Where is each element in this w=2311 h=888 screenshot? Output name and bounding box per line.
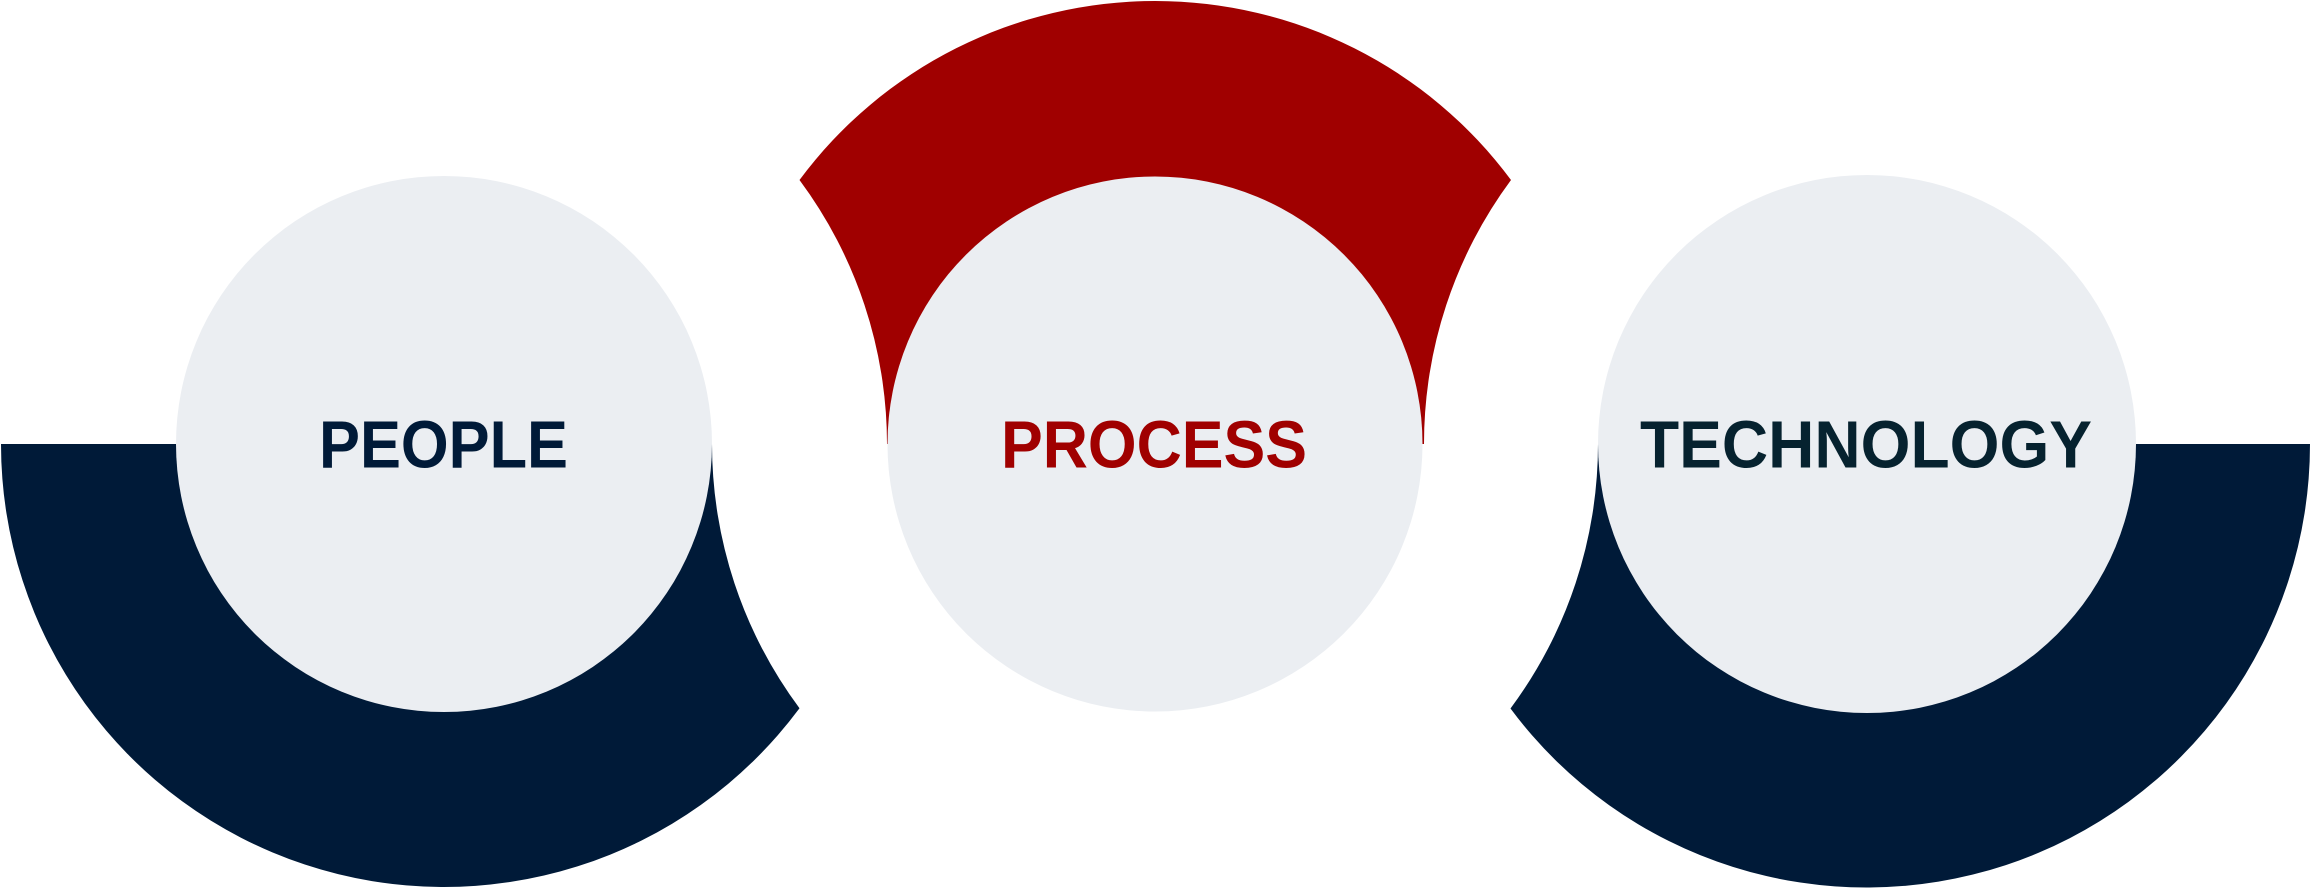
process red arc [800, 1, 1511, 444]
technology circle [1598, 175, 2136, 713]
people navy arc [1, 444, 800, 887]
technology navy arc [1510, 444, 2310, 888]
people circle [176, 176, 712, 712]
process circle [888, 176, 1422, 712]
panel: process [800, 1, 1511, 712]
technology label: TECHNOLOGY [1640, 408, 2092, 483]
panel: people [1, 176, 800, 887]
people label: PEOPLE [319, 408, 568, 483]
process label: PROCESS [1001, 408, 1307, 483]
panel: technology [1510, 175, 2310, 888]
